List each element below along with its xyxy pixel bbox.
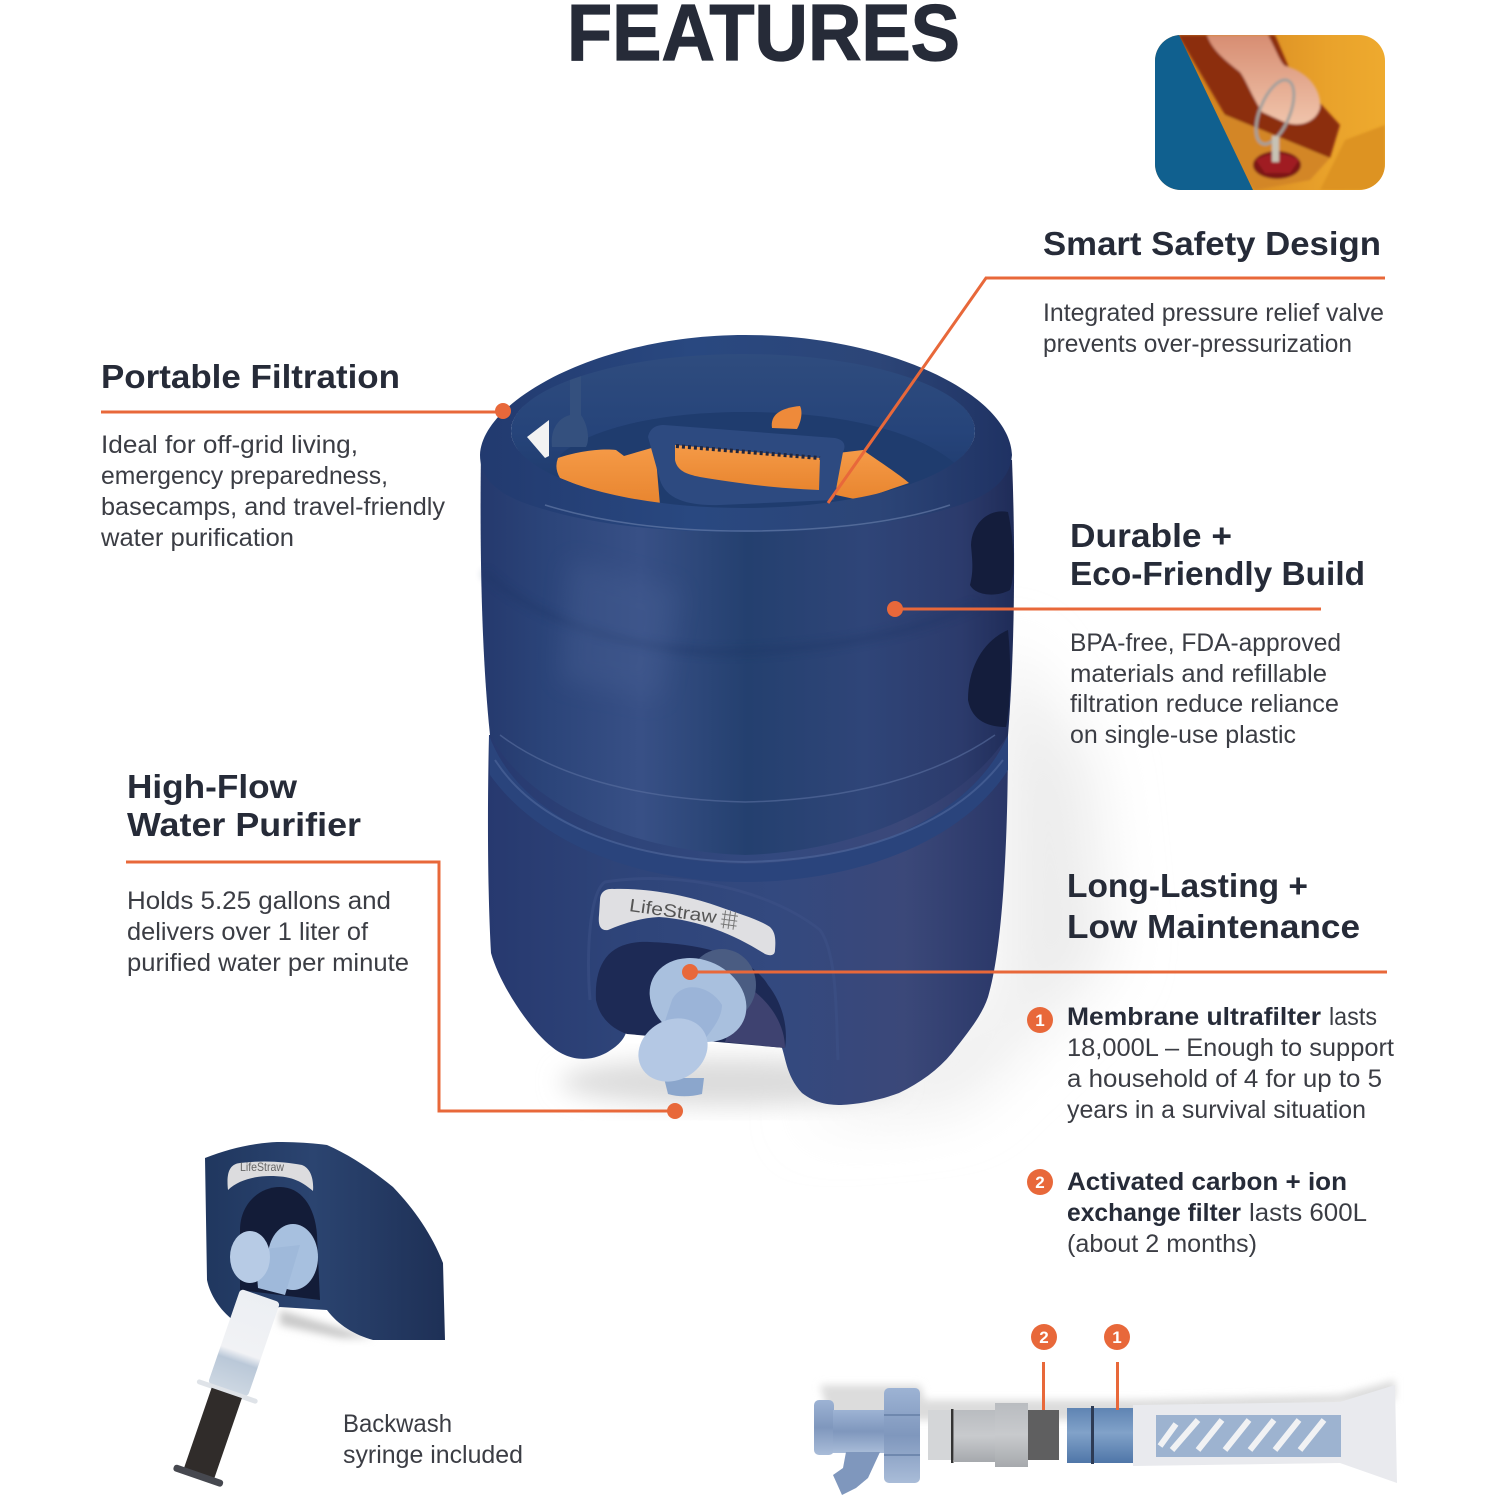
brand text (628, 895, 739, 930)
item 1: lasts (1329, 1003, 1377, 1031)
callout: Long-Lasting (682, 964, 1387, 980)
left opening in rim (527, 420, 549, 458)
spigot neck (662, 987, 722, 1052)
recess around spigot (596, 942, 786, 1048)
navy handle (648, 425, 844, 505)
text block: filtration reduce reliance (1070, 690, 1339, 718)
logo plate (228, 1162, 313, 1191)
interior post (552, 373, 588, 447)
text block: Holds 5.25 gallons and (127, 887, 391, 915)
syringe barrel (167, 1285, 291, 1489)
section: High-Flow Water Purifier (127, 768, 409, 977)
caption (343, 1410, 523, 1469)
ridge highlight (495, 760, 1003, 862)
section: Smart Safety Design (1043, 225, 1384, 358)
handle grip opening (675, 445, 820, 490)
heading: Durable + (1070, 517, 1232, 554)
brand text: LifeStraw (628, 895, 719, 927)
lower base (488, 735, 1008, 1105)
callout: Smart Safety Design (828, 278, 1385, 503)
callout: Durable (887, 601, 1321, 617)
shadow behind tank (800, 640, 1110, 1120)
text block: basecamps, and travel-friendly (101, 493, 445, 521)
rim highlight (545, 505, 950, 531)
crease (484, 572, 975, 652)
text block: purified water per minute (127, 949, 409, 977)
contact shadow (560, 1058, 900, 1106)
item 2: 2 (1035, 1173, 1045, 1192)
text block: Ideal for off-grid living, (101, 431, 358, 459)
text block: on single-use plastic (1070, 721, 1296, 749)
marker 2: 2 (1039, 1328, 1049, 1347)
base ridge (489, 735, 1008, 882)
text block (1070, 629, 1341, 749)
spigot flange (268, 1224, 318, 1290)
spigot cap (230, 1231, 270, 1283)
text block: water purification (100, 524, 294, 552)
seam line (500, 735, 995, 802)
text block: materials and refillable (1070, 660, 1327, 688)
text block (1043, 299, 1384, 358)
callout: Portable Filtration (101, 403, 511, 419)
carbon filter (1028, 1410, 1059, 1460)
marker 2 (1031, 1324, 1057, 1410)
marker 1: 1 (1112, 1328, 1122, 1347)
tank detail shadow (280, 1310, 373, 1338)
inner membrane (1156, 1415, 1341, 1457)
heading: High-Flow (127, 768, 297, 805)
logo plate (599, 889, 775, 955)
valve (814, 1388, 920, 1495)
tank interior (511, 353, 975, 509)
frosted bag (1133, 1385, 1397, 1483)
tank detail (205, 1142, 445, 1340)
item 1 (1027, 1003, 1394, 1124)
interior floor (560, 412, 960, 520)
heading (1067, 867, 1360, 945)
item 2: Activated carbon + ion (1067, 1168, 1347, 1196)
text block: prevents over-pressurization (1043, 330, 1352, 358)
heading: Water Purifier (127, 806, 361, 843)
spigot neck (255, 1245, 300, 1295)
spigot (627, 943, 760, 1096)
item 1: years in a survival situation (1067, 1096, 1366, 1124)
heading: Eco-Friendly Build (1070, 555, 1365, 592)
item 1: 1 (1035, 1011, 1045, 1030)
heading: Low Maintenance (1067, 908, 1360, 945)
item 2: lasts 600L (1249, 1199, 1367, 1227)
blue membrane cartridge (1067, 1406, 1133, 1464)
filter parts (814, 1324, 1397, 1495)
handle grip: lower (968, 630, 1010, 727)
item 1: 18,000L – Enough to support (1067, 1034, 1394, 1062)
recess outline (589, 879, 838, 1060)
text block (100, 431, 445, 552)
heading (1070, 517, 1365, 592)
upper body (481, 450, 1014, 855)
heading: Long-Lasting + (1067, 867, 1308, 904)
callout: High-Flow (126, 862, 683, 1119)
rim ring (480, 335, 1012, 532)
item 2: exchange filter (1067, 1199, 1241, 1227)
spigot flange (636, 943, 760, 1057)
callout lines and dots (101, 278, 1387, 1119)
heading: Smart Safety Design (1043, 225, 1381, 262)
spigot back (688, 949, 756, 1021)
gray carbon housing (928, 1403, 1028, 1467)
orange tab (772, 406, 801, 429)
text block: delivers over 1 liter of (127, 918, 368, 946)
photo: pressure relief valve close-up (1155, 35, 1385, 190)
marker 1 (1104, 1324, 1130, 1410)
caption: syringe included (343, 1441, 523, 1469)
handle grip: upper (970, 511, 1014, 595)
heading (127, 768, 361, 843)
item 2 (1027, 1168, 1367, 1258)
item 2: (about 2 months) (1067, 1230, 1257, 1258)
text block (127, 887, 409, 977)
spigot nozzle (664, 1078, 704, 1096)
soft shadow (820, 1380, 1395, 1420)
body highlight (560, 560, 680, 700)
arch recess (240, 1187, 320, 1300)
brand text: LifeStraw (240, 1160, 284, 1174)
photo: backwash syringe (167, 1142, 445, 1489)
section: Portable Filtration (100, 358, 445, 552)
caption: Backwash (343, 1410, 452, 1438)
heading: Portable Filtration (101, 358, 400, 395)
item 1: a household of 4 for up to 5 (1067, 1065, 1382, 1093)
section: Durable + Eco-Friendly Build (1070, 517, 1365, 749)
spigot cap (627, 1006, 719, 1094)
product: water tank (480, 335, 1014, 1106)
item 1: Membrane ultrafilter (1067, 1003, 1321, 1031)
text block: BPA-free, FDA-approved (1070, 629, 1341, 657)
text block: emergency preparedness, (101, 462, 388, 490)
grip teeth (676, 446, 820, 458)
orange lid left (556, 447, 660, 505)
section: Long-Lasting + Low Maintenance (1027, 867, 1394, 1258)
orange lid right (836, 450, 909, 500)
text block: Integrated pressure relief valve (1043, 299, 1384, 327)
